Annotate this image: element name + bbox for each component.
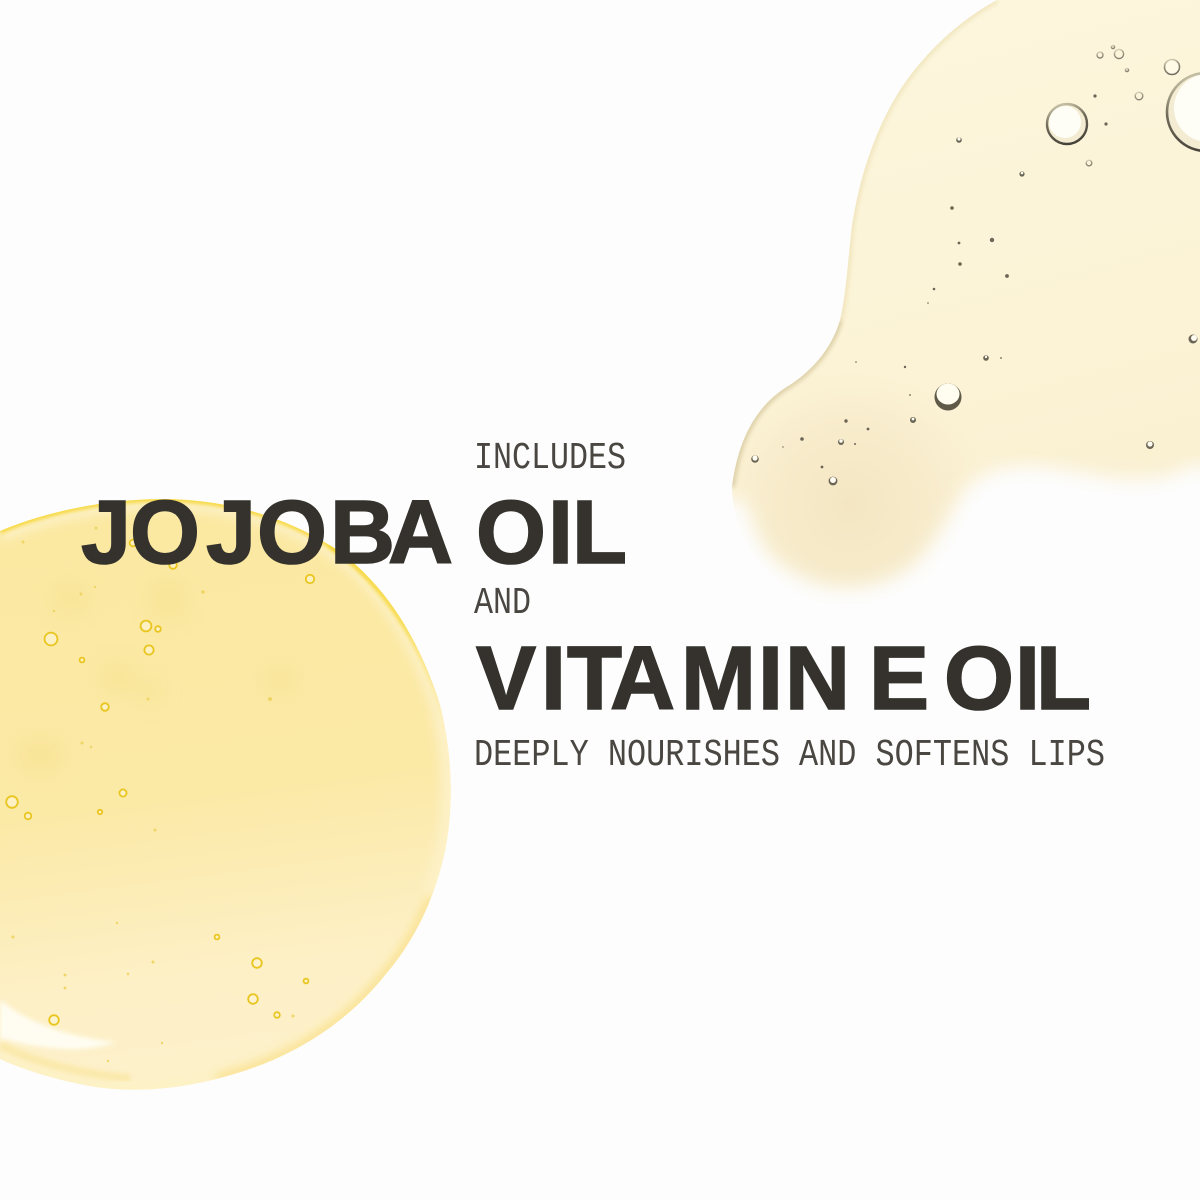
label: includes: INCLUDES	[474, 437, 626, 480]
large oil bubbles	[934, 60, 1200, 410]
heading: vitamin e oil: VITAMIN E OIL	[476, 629, 1091, 729]
tiny yellow specks	[12, 526, 294, 1062]
yellow oil bubbles	[6, 540, 314, 1025]
tiny dark bubbles	[751, 94, 1198, 485]
small pale bubbles	[1086, 45, 1143, 166]
label: and: AND	[474, 582, 531, 625]
yellow droplet body	[0, 499, 451, 1090]
cream droplet body	[732, 0, 1200, 604]
cream droplet shading	[710, 0, 1200, 620]
yellow jojoba oil droplet	[0, 499, 451, 1090]
cream vitamin E oil droplet	[710, 0, 1200, 620]
yellow droplet edge and texture	[0, 499, 451, 1090]
heading: jojoba oil: JOJOBA OIL	[81, 483, 627, 583]
bubble highlights	[752, 137, 1197, 483]
text block	[81, 437, 1105, 777]
